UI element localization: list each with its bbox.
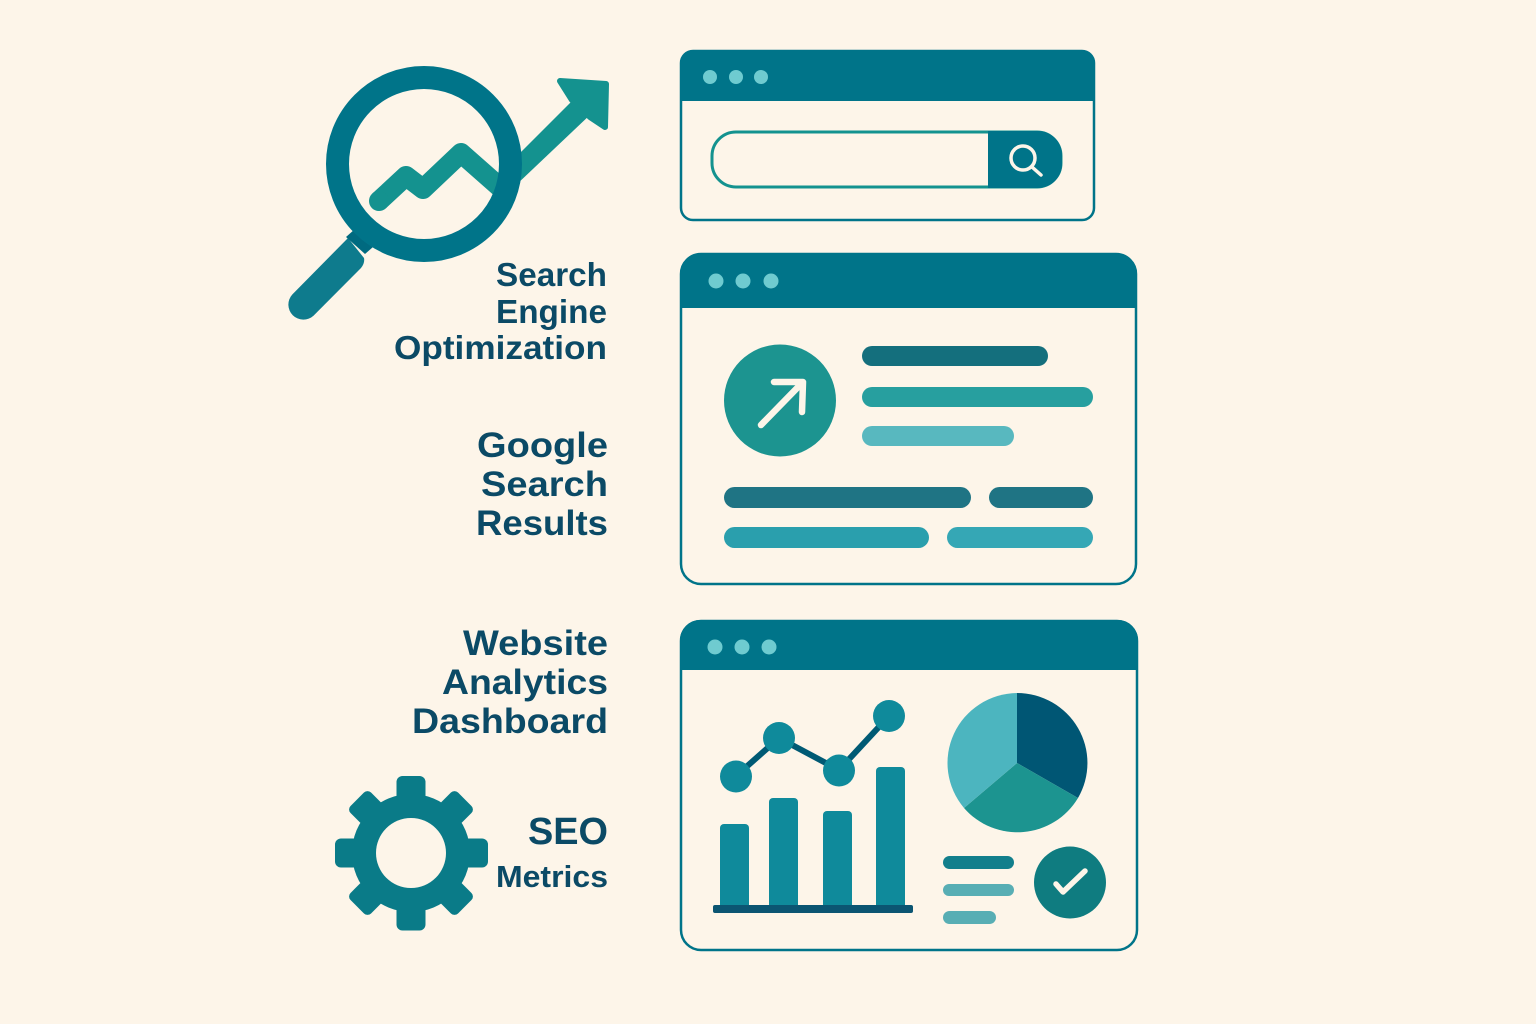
heading: Search Engine Optimization: Engine xyxy=(496,294,607,331)
heading: Google Search Results: Google xyxy=(477,425,608,465)
panel: search browser window xyxy=(680,50,1095,220)
heading: Website Analytics Dashboard: Website xyxy=(463,623,608,663)
icon: circular up arrow xyxy=(724,344,836,456)
panel: analytics dashboard browser window xyxy=(680,620,1138,950)
heading: SEO: SEO xyxy=(528,811,608,853)
search bar xyxy=(712,131,1062,188)
heading: Metrics: Metrics xyxy=(496,859,608,894)
heading: Website Analytics Dashboard: Analytics xyxy=(442,662,608,702)
bar chart xyxy=(713,767,913,913)
panel: search results browser window xyxy=(680,253,1137,584)
heading: Search Engine Optimization: Search xyxy=(496,257,607,294)
heading: Search Engine Optimization xyxy=(394,257,607,367)
icon: magnifying glass with growth arrow xyxy=(288,78,606,320)
heading: Google Search Results xyxy=(476,425,608,543)
line chart xyxy=(720,700,905,792)
heading: Google Search Results: Results xyxy=(476,503,608,543)
legend bars xyxy=(943,856,1014,924)
heading: Website Analytics Dashboard xyxy=(412,623,608,741)
icon: gear xyxy=(335,776,488,930)
result text bars xyxy=(724,346,1093,548)
heading: Search Engine Optimization: Optimization xyxy=(394,330,607,367)
icon: check badge xyxy=(1034,846,1106,918)
heading: Website Analytics Dashboard: Dashboard xyxy=(412,701,608,741)
pie chart xyxy=(947,693,1087,832)
heading: Google Search Results: Search xyxy=(481,464,608,504)
